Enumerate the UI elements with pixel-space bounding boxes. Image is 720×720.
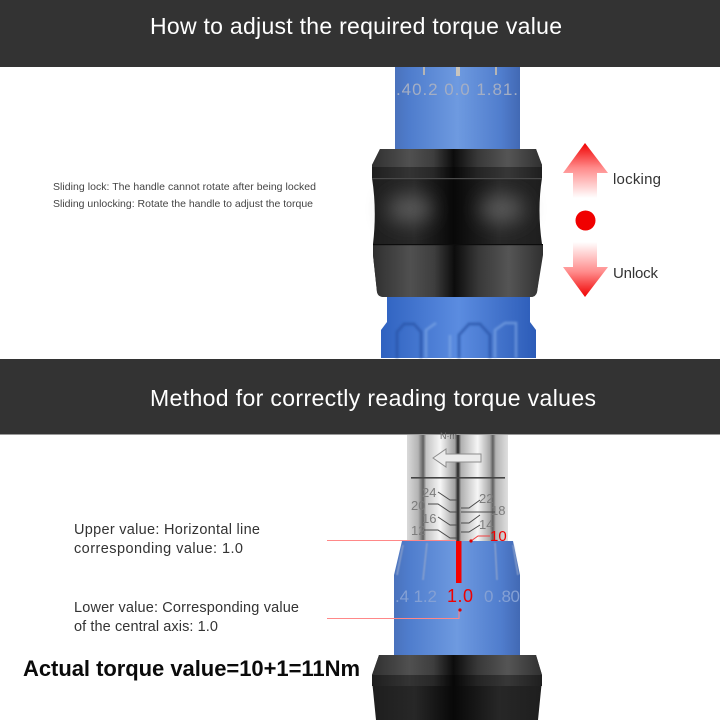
heading: reading values: Method for correctly reading torque values [150,385,596,411]
steel scale shaft [407,431,508,542]
tool: upper view of torque handle [372,67,543,358]
leader lower [327,610,459,618]
label: unlock: Unlock [613,265,658,282]
arrow: locking up [563,143,608,198]
steel scale shaft: 16 [422,511,436,526]
result: actual torque value: Actual torque value=10+1=11Nm [23,656,360,681]
blue shaft with scale [395,67,520,150]
black locking collar [372,149,543,297]
leader upper [327,540,456,542]
text block: upper value: corresponding value: 1.0 [74,541,243,557]
arrow: unlock down [563,242,608,297]
tool: lower view with scale reading [372,431,542,720]
text block: sliding lock explanation: Sliding lock: The handle cannot rotate after being locked [53,181,316,193]
text block: upper value: Upper value: Horizontal line [74,522,260,538]
label: locking: locking [613,171,661,188]
steel scale shaft: 12 [411,523,425,538]
text block: sliding lock explanation [53,181,316,210]
top title band [0,0,720,67]
steel scale shaft: 18 [491,503,505,518]
icon: red centre dot [576,210,596,230]
blue scale sleeve [394,541,520,656]
steel scale shaft: 22 [479,491,493,506]
blue shaft with scale: .40.2 0.0 1.81. [396,80,518,99]
value 1.0: 1.0 [447,586,473,606]
text block: lower value: Lower value: Corresponding value [74,600,299,616]
text block: lower value: of the central axis: 1.0 [74,619,218,635]
steel scale shaft: N·m [440,431,457,441]
steel scale shaft: 14 [479,517,493,532]
steel scale shaft: 24 [422,485,436,500]
blue scale sleeve: 0 .80 [484,587,520,606]
heading: adjust torque: How to adjust the required torque value [150,13,562,39]
callout: reading markers [327,528,507,618]
blue scale sleeve: .4 1.2 [395,587,437,606]
text block: lower value [74,600,299,635]
second title band [0,359,720,434]
text block: sliding lock explanation: Sliding unlocking: Rotate the handle to adjust the torque [53,198,313,210]
centre reading bar [456,541,462,583]
text block: upper value [74,522,260,557]
value 10: 10 [490,528,507,545]
black collar below sleeve [372,655,542,720]
steel scale shaft: 20 [411,498,425,513]
lower blue knurled grip [381,296,536,358]
